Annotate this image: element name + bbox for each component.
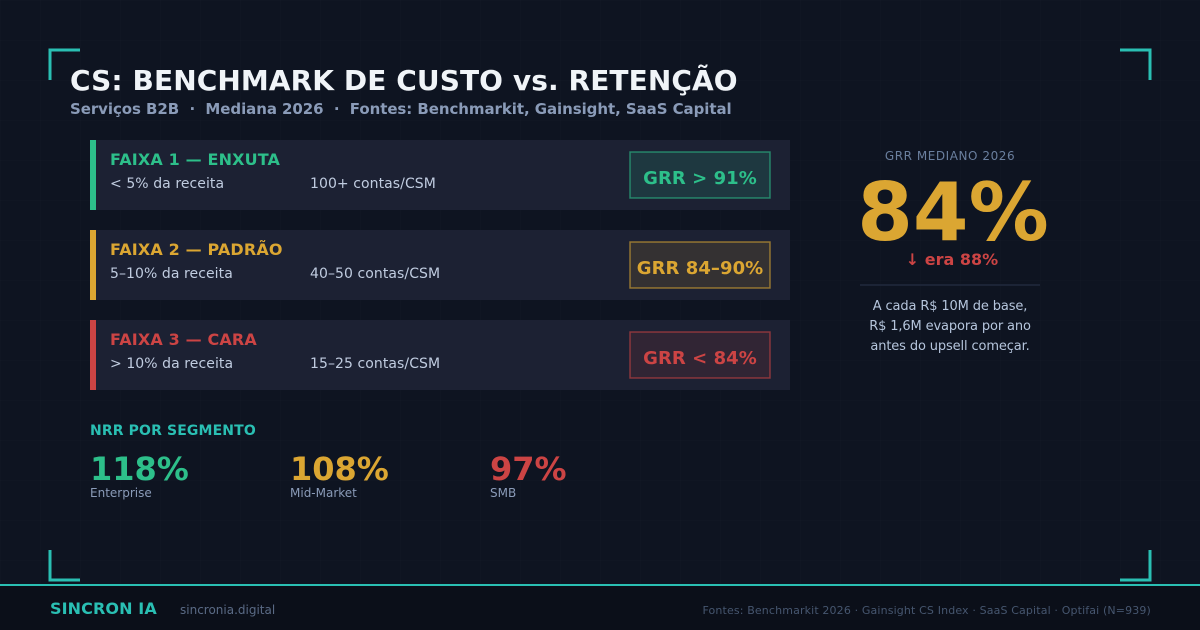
footer [0,585,1200,630]
title: CS: BENCHMARK DE CUSTO vs. RETENÇÃO [70,64,738,97]
GRR label: GRR MEDIANO 2026 [885,149,1015,163]
NRR mid-market value: 108% [290,450,389,488]
brand: SINCRON IA [50,599,157,618]
faixa 2 accounts: 40–50 contas/CSM [310,266,440,282]
NRR enterprise label: Enterprise [90,486,152,500]
faixa 3 cost: > 10% da receita [110,356,233,372]
faixa 3 GRR badge [629,331,771,379]
NRR heading: NRR POR SEGMENTO [90,423,256,439]
NRR mid-market label: Mid-Market [290,486,357,500]
sources: Fontes: Benchmarkit 2026 · Gainsight CS Index · SaaS Capital · Optifai (N=939) [702,604,1151,617]
faixa 1 accounts: 100+ contas/CSM [310,176,436,192]
panel: faixa 1 [90,140,790,210]
faixa 2 heading: FAIXA 2 — PADRÃO [110,240,283,259]
site: sincronia.digital [180,603,275,617]
faixa 1 heading: FAIXA 1 — ENXUTA [110,150,280,169]
explanation: R$ 1,6M evapora por ano [869,319,1031,334]
faixa 1 GRR badge: GRR > 91% [643,168,757,189]
big number: 84% [857,166,1049,259]
faixa 2 GRR badge: GRR 84–90% [637,258,763,279]
panel: faixa 2 [90,230,790,300]
faixa 2 cost: 5–10% da receita [110,266,233,282]
explanation [869,299,1031,354]
explanation: antes do upsell começar. [870,339,1030,354]
previous value: ↓ era 88% [906,250,998,269]
NRR SMB value: 97% [490,450,567,488]
NRR SMB label: SMB [490,486,516,500]
faixa 3 GRR badge: GRR < 84% [643,348,757,369]
faixa 1 cost: < 5% da receita [110,176,224,192]
faixa 3 heading: FAIXA 3 — CARA [110,330,257,349]
faixa 2 GRR badge [629,241,771,289]
subtitle: Serviços B2B · Mediana 2026 · Fontes: Benchmarkit, Gainsight, SaaS Capital [70,100,732,118]
NRR enterprise value: 118% [90,450,189,488]
explanation: A cada R$ 10M de base, [873,299,1027,314]
panel: faixa 3 [90,320,790,390]
faixa 3 accounts: 15–25 contas/CSM [310,356,440,372]
faixa 1 GRR badge [629,151,771,199]
